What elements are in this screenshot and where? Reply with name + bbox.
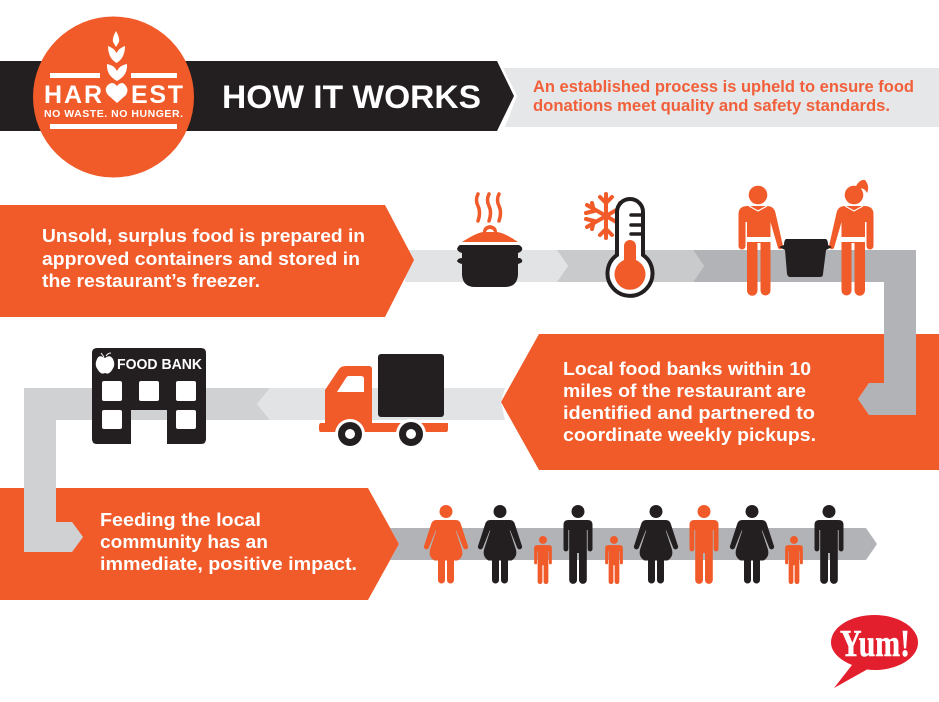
panel: step one: Unsold, surplus food is prepared in [42, 226, 365, 246]
step two text [563, 359, 816, 445]
subtitle text [533, 78, 914, 115]
panel: step three [0, 488, 399, 600]
step three text: immediate, positive impact. [100, 554, 357, 574]
logo: Yum speech bubble: Yum! [840, 623, 910, 665]
logo: Harvest badge: HAR [44, 81, 102, 109]
logo: Harvest badge: EST [131, 81, 183, 109]
header band: black title bar [0, 61, 514, 131]
worker: woman with ponytail [829, 180, 874, 296]
step two text: identified and partnered to [563, 403, 815, 423]
flow arrow: bottom row [390, 528, 877, 560]
logo: Harvest badge: NO WASTE. NO HUNGER. [44, 108, 183, 120]
people row: community [424, 505, 844, 584]
subtitle text: An established process is upheld to ensure food [533, 78, 914, 96]
title: HOW IT WORKS [222, 79, 481, 115]
step two text: coordinate weekly pickups. [563, 425, 816, 445]
logo: Harvest badge [33, 16, 194, 178]
icon: delivery truck [319, 354, 448, 449]
icon: food bank building: FOOD BANK [117, 357, 202, 373]
panel: step two [501, 334, 939, 470]
icon: two workers carrying a pot [738, 180, 874, 296]
subtitle text: donations meet quality and safety standards. [533, 97, 890, 115]
panel: step one [0, 205, 414, 317]
panel: step one: the restaurant’s freezer. [42, 271, 260, 291]
icon: food bank building [92, 348, 206, 444]
logo: Yum speech bubble [831, 615, 918, 688]
panel: step one: approved containers and stored in [42, 249, 360, 269]
step three text: community has an [100, 532, 268, 552]
step two text: Local food banks within 10 [563, 359, 811, 379]
icon: steaming pot [457, 194, 522, 287]
worker: man [738, 186, 783, 296]
header band: grey subtitle strip [503, 68, 939, 127]
icon: snowflake and thermometer [586, 194, 653, 296]
flow arrows: top row [405, 250, 916, 415]
flow arrows: middle row [24, 388, 505, 552]
step three text: Feeding the local [100, 510, 261, 530]
step two text: miles of the restaurant are [563, 381, 806, 401]
pot [779, 239, 832, 277]
step three text [100, 510, 357, 574]
